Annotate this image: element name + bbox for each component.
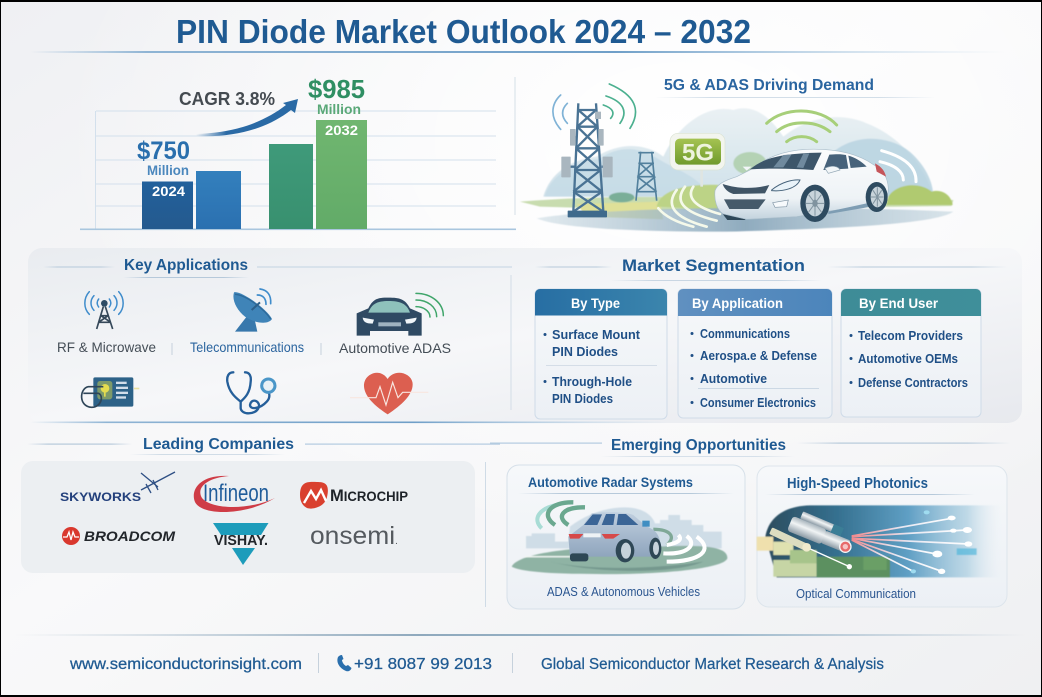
label: 2024 value	[137, 137, 190, 199]
icon: fiber cables	[769, 511, 852, 569]
section: key applications	[43, 257, 512, 414]
icon: 5G sign	[670, 133, 725, 187]
icon: connected car	[715, 149, 888, 222]
section: market segmentation	[535, 256, 1007, 419]
icon: tower signal waves	[553, 84, 636, 129]
card: by end user: By End User	[859, 295, 939, 311]
label: 2032 value: $985	[308, 74, 365, 104]
card: high-speed photonics: Optical Communication	[796, 586, 916, 601]
card: automotive radar systems: Automotive Radar Systems	[528, 474, 693, 490]
heading: emerging opportunities: Emerging Opportunities	[611, 437, 786, 454]
icon: ADAS car	[357, 293, 443, 336]
label: 2024 value: 2024	[152, 183, 185, 199]
logo: Broadcom	[62, 527, 175, 545]
card: by application: Aerospa.e & Defense	[700, 348, 817, 363]
card: by type: PIN Diodes	[552, 391, 613, 406]
card: by application	[678, 289, 832, 418]
logo: Vishay	[213, 523, 268, 565]
icon: car rear view	[568, 512, 661, 562]
logo: Skyworks: SKYWORKS	[60, 490, 141, 504]
icon: phone	[337, 655, 352, 671]
label: 2032 value	[308, 74, 365, 138]
icon: satellite dish	[233, 289, 272, 332]
icon: stethoscope	[227, 372, 275, 413]
icon: car signal waves	[658, 111, 916, 227]
card: by type: PIN Diodes	[552, 344, 618, 359]
icon: large cell tower	[570, 103, 608, 212]
card: by application: By Application	[692, 295, 783, 311]
logo: Skyworks	[60, 472, 175, 504]
logo: Broadcom: BROADCOM	[84, 528, 175, 544]
label: telecommunications: Telecommunications	[190, 339, 304, 355]
label: 2024 value: Million	[147, 163, 189, 178]
label: 2032 value: Million	[317, 102, 361, 117]
panel: key applications and market segmentation	[28, 248, 1022, 423]
icon: heart with pulse	[350, 373, 428, 414]
card: by type: Surface Mount	[552, 327, 641, 342]
card: automotive radar systems: ADAS & Autonomous Vehicles	[547, 585, 700, 599]
title: PIN Diode Market Outlook 2024 – 2032	[176, 13, 751, 50]
logo: Vishay: VISHAY.	[214, 533, 268, 549]
icon: 5G sign: 5G	[682, 139, 714, 166]
card: by application: Automotive	[700, 371, 767, 386]
arrow: growth	[196, 99, 298, 136]
logo: Microchip	[300, 482, 408, 509]
footer: tagline: Global Semiconductor Market Research & Analysis	[541, 656, 884, 673]
card: by end user: Defense Contractors	[858, 375, 968, 390]
icon: RF tower	[85, 292, 123, 329]
heading: market segmentation: Market Segmentation	[622, 256, 805, 275]
card: by end user: Automotive OEMs	[858, 351, 958, 366]
footer	[15, 634, 1025, 673]
label: 2032 value: 2032	[325, 122, 358, 138]
illustration: radar car	[512, 502, 727, 574]
heading: 5G and ADAS: 5G & ADAS Driving Demand	[664, 77, 874, 94]
logo: Infineon: Infineon	[203, 480, 269, 507]
card: by application: Consumer Electronics	[700, 395, 816, 410]
heading: key applications: Key Applications	[124, 257, 248, 274]
panel: company logos	[21, 461, 475, 573]
card: by end user	[841, 289, 981, 417]
heading: leading companies: Leading Companies	[143, 436, 294, 453]
logo: Infineon	[194, 476, 275, 512]
card: automotive radar systems	[507, 465, 745, 609]
label: 2024 value: $750	[137, 137, 190, 165]
logo: Microchip: MICROCHIP	[330, 486, 408, 505]
illustration: optical fibers	[757, 505, 1003, 577]
card: by type	[535, 289, 667, 419]
card: by type: Through-Hole	[552, 374, 632, 389]
bar chart: market size growth	[80, 74, 516, 230]
label: RF and microwave: RF & Microwave	[57, 339, 156, 355]
card: by end user: Telecom Providers	[858, 328, 963, 343]
illustration: 5G tower and connected car	[520, 84, 953, 232]
logo: onsemi: onsemi .	[310, 522, 398, 550]
label: CAGR: CAGR 3.8%	[179, 89, 275, 109]
card: by application: Communications	[700, 326, 790, 341]
icon: radar waves	[537, 502, 705, 562]
icon: electronic module	[82, 377, 139, 407]
footer: phone number: +91 8087 99 2013	[354, 656, 492, 673]
card: high-speed photonics	[757, 466, 1007, 607]
card: by type: By Type	[571, 295, 620, 311]
card: high-speed photonics: High-Speed Photonics	[787, 475, 928, 492]
icon: light rays	[852, 518, 968, 571]
footer: website: www.semiconductorinsight.com	[69, 656, 302, 673]
label: automotive ADAS: Automotive ADAS	[339, 340, 451, 356]
icon: small tower	[636, 152, 657, 201]
